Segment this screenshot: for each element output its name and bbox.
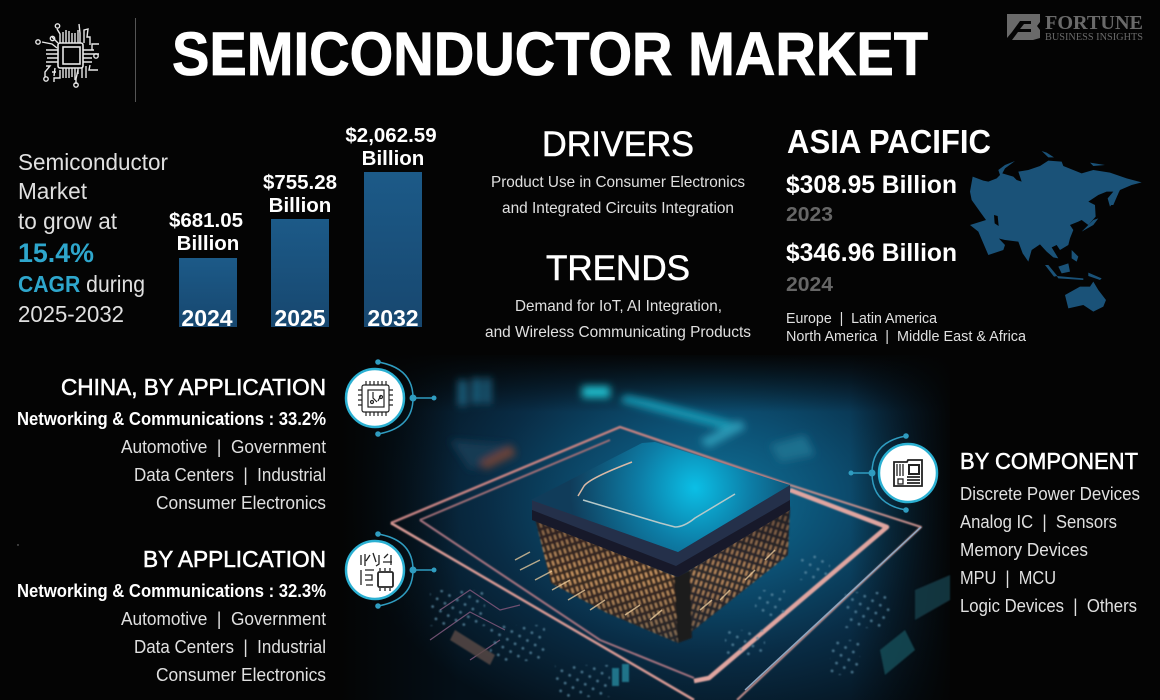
circuit board background image (340, 352, 955, 700)
bar 2024: 2024 (181, 305, 233, 331)
bar 2025: Billion (269, 194, 331, 217)
growth text block: 15.4% (18, 238, 94, 268)
chip body (532, 485, 790, 577)
panel: by application (17, 546, 326, 685)
asia pacific stats: 2023 (786, 204, 833, 226)
panel: by component: Memory Devices (960, 540, 1088, 560)
stray dot (17, 544, 19, 546)
panel: by component (960, 448, 1140, 616)
asia pacific stats: ASIA PACIFIC (787, 123, 991, 160)
title divider (135, 18, 136, 102)
bar 2025: 2025 (274, 305, 326, 331)
title: SEMICONDUCTOR MARKET (172, 20, 928, 88)
panel: by component: Logic Devices | Others (960, 596, 1137, 616)
trends: TRENDS (546, 249, 690, 288)
brand logo: Fortune Business Insights: FORTUNE (1045, 12, 1143, 34)
growth text block: 2025-2032 (18, 301, 124, 327)
panel: by application: Networking & Communications : 32.3% (17, 581, 326, 601)
icon: application circuit (346, 531, 436, 609)
trends: and Wireless Communicating Products (485, 324, 751, 341)
drivers: and Integrated Circuits Integration (502, 200, 734, 217)
asia pacific stats: 2024 (786, 274, 834, 296)
panel: by component: Discrete Power Devices (960, 484, 1140, 504)
growth text block: Market (18, 178, 88, 204)
trends (485, 249, 751, 341)
asia pacific stats: North America | Middle East & Africa (786, 328, 1027, 345)
bar 2032 (345, 124, 437, 331)
brand logo: Fortune Business Insights: BUSINESS INSIGHTS (1045, 32, 1143, 43)
logo icon: circuit chip (36, 24, 99, 87)
panel: China by application: Automotive | Government (121, 437, 326, 457)
pink traces (391, 427, 921, 700)
panel: by component: Analog IC | Sensors (960, 512, 1117, 532)
asia pacific stats (786, 123, 1027, 345)
bar 2024: Billion (177, 232, 239, 255)
board dot clusters (430, 555, 950, 697)
panel: China by application (17, 374, 326, 513)
icon: component motherboard (848, 433, 937, 513)
panel: China by application: Consumer Electronics (156, 493, 326, 513)
bar 2032: $2,062.59 (345, 124, 437, 147)
bar 2032: 2032 (367, 305, 419, 331)
trends: Demand for IoT, AI Integration, (515, 298, 722, 315)
panel: China by application: CHINA, BY APPLICATION (61, 374, 326, 400)
asia pacific stats: Europe | Latin America (786, 310, 938, 327)
bar 2025 (263, 171, 337, 331)
panel: by application: Consumer Electronics (156, 665, 326, 685)
panel: by component: MPU | MCU (960, 568, 1056, 588)
drivers: DRIVERS (542, 125, 694, 164)
growth text block: CAGR during (18, 271, 145, 297)
bar chart (169, 124, 437, 331)
drivers: Product Use in Consumer Electronics (491, 174, 745, 191)
bar 2025: $755.28 (263, 171, 337, 194)
panel: by application: BY APPLICATION (143, 546, 326, 572)
growth text block: to grow at (18, 208, 118, 234)
glowing pin highlights (515, 550, 775, 620)
panel: by component: BY COMPONENT (960, 448, 1138, 474)
drivers (491, 125, 745, 217)
asia pacific stats: $308.95 Billion (786, 171, 957, 199)
chip pins (535, 507, 790, 643)
brand logo: Fortune Business Insights (1007, 12, 1143, 43)
panel: by application: Automotive | Government (121, 609, 326, 629)
growth text block (18, 149, 168, 327)
chip top (531, 442, 790, 552)
asia pacific stats: $346.96 Billion (786, 239, 957, 267)
icon: china application chip (346, 359, 436, 437)
bar 2032: Billion (362, 147, 424, 170)
panel: by application: Data Centers | Industrial (134, 637, 326, 657)
growth text block: Semiconductor (18, 149, 168, 175)
bar 2024 (169, 209, 243, 331)
world map: Asia Pacific (970, 151, 1142, 312)
bar 2024: $681.05 (169, 209, 243, 232)
panel: China by application: Data Centers | Industrial (134, 465, 326, 485)
panel: China by application: Networking & Communications : 33.2% (17, 409, 326, 429)
